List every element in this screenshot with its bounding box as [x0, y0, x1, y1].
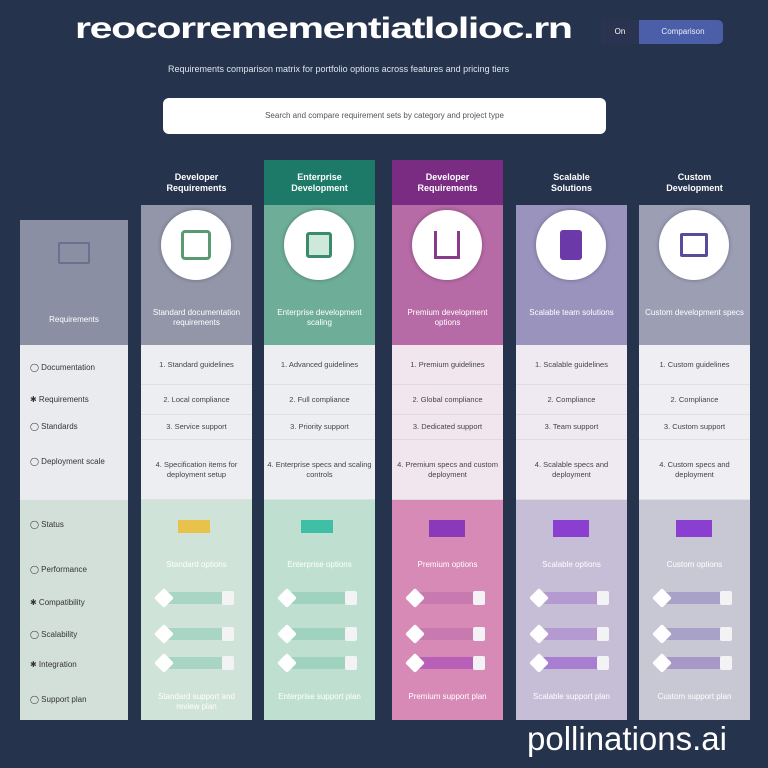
panel: column E: Development — [666, 183, 723, 193]
panel: column A: 2. Local compliance — [163, 394, 230, 404]
panel: column A — [141, 172, 252, 720]
panel: column C: Developer — [426, 172, 469, 182]
panel: column B — [264, 160, 375, 720]
panel: column D: 4. Scalable specs and deployment — [535, 460, 608, 478]
panel: column E: Custom — [678, 172, 711, 182]
panel: label column: Requirements — [49, 315, 99, 324]
panel: column C — [392, 160, 503, 720]
panel: column B: Development — [291, 183, 348, 193]
icon: E — [659, 210, 729, 280]
toggle buttons: Comparison — [661, 27, 705, 36]
panel: label column: ✱ Integration — [30, 660, 77, 669]
panel: label column: ◯ Deployment scale — [30, 457, 105, 466]
panel: label column: ◯ Standards — [30, 422, 78, 431]
toggle buttons — [601, 20, 723, 44]
panel: column D — [516, 172, 627, 720]
panel: column E: 3. Custom support — [664, 422, 725, 431]
panel: label column: ◯ Performance — [30, 565, 87, 574]
panel: label column: ◯ Scalability — [30, 630, 77, 639]
panel: column B: Enterprise development scaling — [277, 308, 362, 327]
panel: column B: 3. Priority support — [290, 422, 349, 431]
panel: column D: Scalable options — [542, 560, 601, 569]
panel: column A: 3. Service support — [166, 422, 227, 431]
panel: column D: 1. Scalable guidelines — [535, 360, 608, 368]
title: reocorremementiatlolioc.rn — [75, 12, 572, 45]
icon: label — [58, 242, 90, 264]
panel: label column: ✱ Compatibility — [30, 598, 85, 607]
panel: column A: 4. Specification items for deployment setup — [156, 460, 237, 478]
panel: column A: 1. Standard guidelines — [159, 360, 234, 368]
subtitle: Requirements comparison matrix for portfolio options across features and pricing tiers — [168, 64, 509, 74]
panel: label column — [20, 220, 128, 720]
panel: label column: ◯ Support plan — [30, 695, 87, 704]
panel: column E — [639, 172, 750, 720]
panel: column E: Custom options — [667, 560, 722, 569]
panel: column E: Custom development specs — [645, 308, 744, 317]
panel: column A: Requirements — [166, 183, 227, 193]
panel: column C: 3. Dedicated support — [413, 422, 482, 431]
panel: column C: 2. Global compliance — [412, 394, 483, 404]
panel: column E: 4. Custom specs and deployment — [659, 460, 730, 478]
panel: column B: 1. Advanced guidelines — [281, 360, 358, 368]
panel: column A: Standard documentation requirements — [153, 308, 240, 327]
icon: C — [412, 210, 482, 280]
panel: column B: Enterprise — [297, 172, 342, 182]
panel: column D: Scalable — [553, 172, 590, 182]
icon: A — [161, 210, 231, 280]
panel: column E: 1. Custom guidelines — [659, 360, 730, 368]
panel: column B: 4. Enterprise specs and scaling controls — [267, 460, 372, 478]
panel: column C: 4. Premium specs and custom deployment — [397, 460, 498, 478]
panel: label column: ◯ Status — [30, 520, 64, 529]
panel: column C: Requirements — [417, 183, 478, 193]
panel: label column: ✱ Requirements — [30, 395, 89, 404]
search bar — [163, 98, 606, 134]
panel: column D: Solutions — [551, 183, 592, 193]
panel: column A: Developer — [175, 172, 218, 182]
panel: column B: Enterprise options — [287, 560, 352, 569]
panel: column B: 2. Full compliance — [289, 394, 350, 404]
panel: column E: Custom support plan — [658, 692, 731, 701]
panel: column C: Premium development options — [407, 308, 488, 327]
panel: column D: Scalable team solutions — [529, 308, 614, 317]
icon: D — [536, 210, 606, 280]
panel: column D: 3. Team support — [545, 422, 598, 431]
panel: column E: 2. Compliance — [671, 394, 718, 404]
toggle buttons: On — [615, 27, 625, 36]
search bar: Search and compare requirement sets by category and project type — [265, 111, 504, 120]
panel: column B: Enterprise support plan — [278, 692, 361, 701]
panel: column C: 1. Premium guidelines — [410, 360, 485, 368]
panel: column A: Standard options — [166, 560, 227, 569]
icon: B — [284, 210, 354, 280]
panel: column D: 2. Compliance — [548, 394, 595, 404]
panel: column A: Standard support and review plan — [158, 692, 235, 711]
panel: label column: ◯ Documentation — [30, 363, 95, 372]
panel: column D: Scalable support plan — [533, 692, 610, 701]
watermark: pollinations.ai — [527, 720, 727, 757]
panel: column C: Premium support plan — [408, 692, 487, 701]
panel: column C: Premium options — [417, 560, 478, 569]
